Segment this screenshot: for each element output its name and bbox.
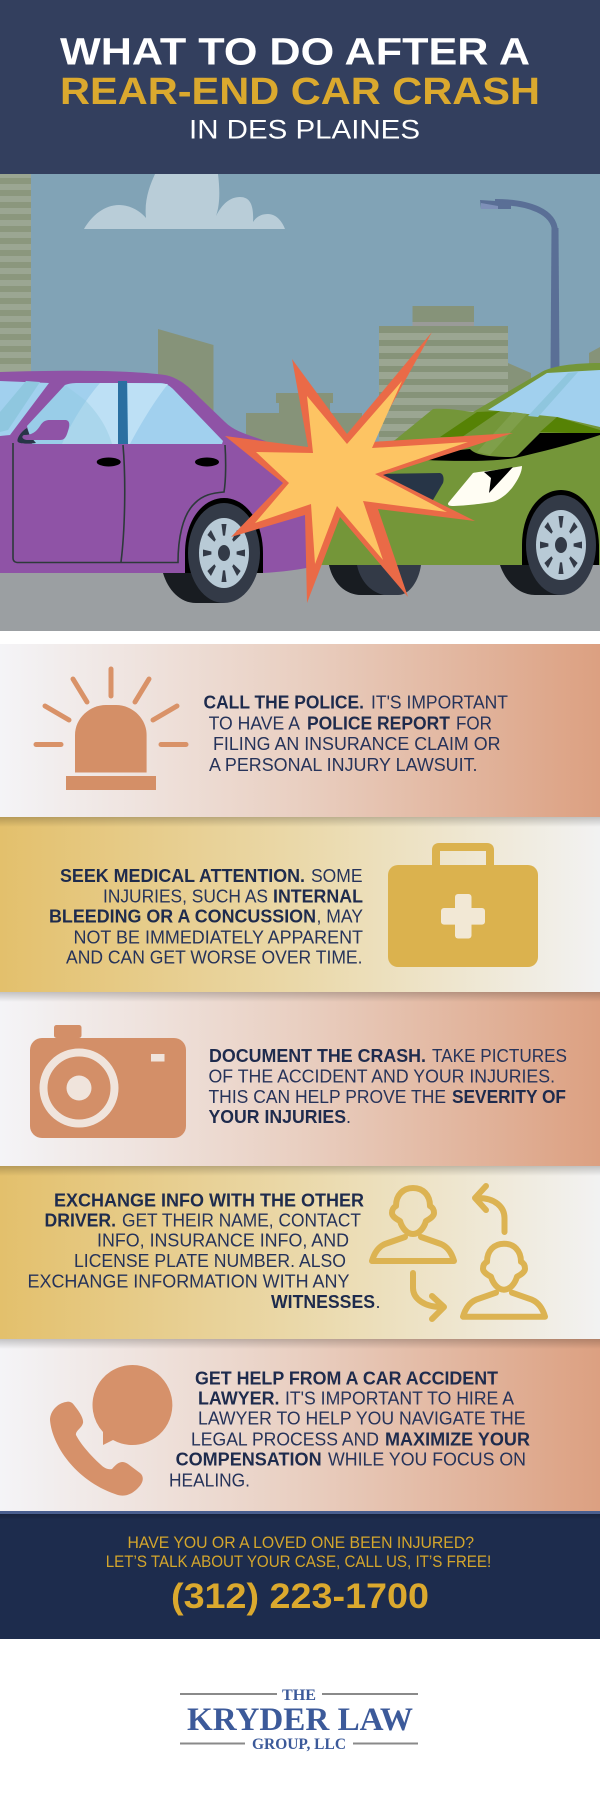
low stepped building	[246, 393, 362, 475]
middle building	[158, 329, 214, 440]
front wheel	[526, 495, 596, 595]
grille	[375, 473, 444, 500]
title: WHAT TO DO AFTER A	[60, 32, 530, 74]
text: document the crash: SEVERITY OF	[452, 1087, 566, 1107]
big striped building	[379, 306, 531, 446]
text: lawyer: LAWYER.	[198, 1389, 280, 1409]
logo: THE	[282, 1687, 316, 1704]
logo: KRYDER LAW	[187, 1702, 413, 1738]
text: medical attention: AND CAN GET WORSE OVER TIME.	[66, 948, 362, 968]
wheel arch	[185, 498, 263, 573]
impact star	[225, 332, 513, 603]
purple car	[0, 371, 320, 603]
road	[0, 565, 600, 631]
text: exchange info: WITNESSES	[271, 1292, 375, 1312]
text: medical attention	[49, 866, 363, 968]
text: exchange info: GET THEIR NAME, CONTACT	[122, 1210, 361, 1230]
front wheel	[188, 503, 260, 603]
text: call the police: CALL THE POLICE.	[204, 693, 364, 713]
text: call the police: FOR	[456, 714, 492, 734]
text: exchange info: LICENSE PLATE NUMBER. ALSO	[74, 1251, 346, 1271]
text: lawyer: WHILE YOU FOCUS ON	[328, 1450, 526, 1470]
text: document the crash	[208, 1046, 567, 1127]
arrow down-right	[413, 1273, 444, 1319]
icon: siren	[36, 669, 186, 790]
text: lawyer: GET HELP FROM A CAR ACCIDENT	[195, 1369, 498, 1389]
title	[60, 32, 540, 145]
illustration: crash scene	[0, 174, 600, 631]
icon: two people exchanging	[372, 1186, 545, 1319]
text: lawyer: COMPENSATION	[176, 1450, 322, 1470]
text: document the crash: .	[346, 1107, 351, 1127]
purple car body	[0, 371, 320, 573]
door pillar	[118, 381, 128, 444]
text: lawyer: HEALING.	[169, 1470, 250, 1490]
text: medical attention: INTERNAL	[273, 887, 363, 907]
text: document the crash: TAKE PICTURES	[432, 1046, 567, 1066]
side mirror	[17, 420, 69, 444]
green car	[312, 363, 600, 595]
hood gap	[425, 433, 600, 461]
wheel arch	[522, 490, 599, 565]
icon: camera	[30, 1025, 186, 1138]
title: REAR-END CAR CRASH	[60, 71, 540, 113]
panel: call the police	[0, 644, 600, 817]
text: call the police: TO HAVE A	[209, 714, 300, 734]
far right building	[589, 347, 600, 370]
title: IN DES PLAINES	[189, 115, 420, 145]
green car body	[312, 363, 600, 565]
text: exchange info: EXCHANGE INFORMATION WITH ANY	[28, 1271, 350, 1291]
footer call to action	[0, 1511, 600, 1639]
broken headlight	[448, 466, 522, 506]
cloud	[84, 174, 285, 229]
person two	[463, 1244, 545, 1317]
person one	[372, 1188, 454, 1261]
text: exchange info: INFO, INSURANCE INFO, AND	[97, 1230, 349, 1250]
text: lawyer: IT'S IMPORTANT TO HIRE A	[285, 1389, 514, 1409]
text: call the police: IT'S IMPORTANT	[371, 693, 508, 713]
rear window	[0, 381, 49, 436]
icon: first aid kit	[388, 847, 538, 967]
call to action text	[106, 1534, 491, 1571]
text: document the crash: DOCUMENT THE CRASH.	[209, 1046, 426, 1066]
rear wheel shadow	[500, 560, 561, 595]
text: call the police: A PERSONAL INJURY LAWSUIT.	[209, 755, 478, 775]
panel: exchange info	[0, 1166, 600, 1339]
side windows	[27, 383, 223, 444]
far wheel	[329, 565, 421, 595]
text: call the police: FILING AN INSURANCE CLAIM OR	[213, 734, 500, 754]
arrow up-left	[475, 1186, 504, 1232]
header band	[0, 0, 600, 174]
icon: phone and speech bubble	[50, 1365, 172, 1496]
panel: document the crash	[0, 992, 600, 1166]
text: exchange info: .	[376, 1292, 381, 1312]
text: lawyer: MAXIMIZE YOUR	[385, 1429, 530, 1449]
logo	[180, 1687, 418, 1753]
text: medical attention: , MAY	[316, 907, 363, 927]
text: document the crash: THIS CAN HELP PROVE THE	[208, 1087, 446, 1107]
text: medical attention: SEEK MEDICAL ATTENTION.	[60, 866, 305, 886]
text: document the crash: YOUR INJURIES	[208, 1107, 346, 1127]
text: medical attention: SOME	[311, 866, 362, 886]
text: lawyer	[169, 1369, 530, 1490]
street lamp	[480, 200, 560, 372]
text: medical attention: NOT BE IMMEDIATELY APPARENT	[74, 928, 363, 948]
text: call the police	[204, 693, 508, 775]
text: exchange info	[28, 1190, 381, 1312]
text: exchange info: EXCHANGE INFO WITH THE OTHER	[54, 1190, 364, 1210]
logo: GROUP, LLC	[252, 1736, 346, 1753]
panel: seek medical attention	[0, 817, 600, 992]
panel: get help from a lawyer	[0, 1339, 600, 1511]
call to action text: HAVE YOU OR A LOVED ONE BEEN INJURED?	[128, 1534, 474, 1552]
door outlines	[13, 443, 226, 562]
text: document the crash: OF THE ACCIDENT AND YOUR INJURIES.	[208, 1066, 555, 1086]
hood shading	[440, 411, 600, 455]
door handles	[97, 458, 219, 466]
phone number: (312) 223-1700	[171, 1577, 429, 1616]
windshield	[488, 370, 600, 427]
text: lawyer: LAWYER TO HELP YOU NAVIGATE THE	[198, 1409, 526, 1429]
text: lawyer: LEGAL PROCESS AND	[191, 1429, 379, 1449]
text: medical attention: INJURIES, SUCH AS	[103, 887, 268, 907]
left striped building	[0, 174, 31, 374]
text: exchange info: DRIVER.	[44, 1210, 116, 1230]
text: medical attention: BLEEDING OR A CONCUSSION	[49, 907, 316, 927]
call to action text: LET’S TALK ABOUT YOUR CASE, CALL US, IT’S FREE!	[106, 1553, 491, 1571]
text: call the police: POLICE REPORT	[307, 714, 450, 734]
